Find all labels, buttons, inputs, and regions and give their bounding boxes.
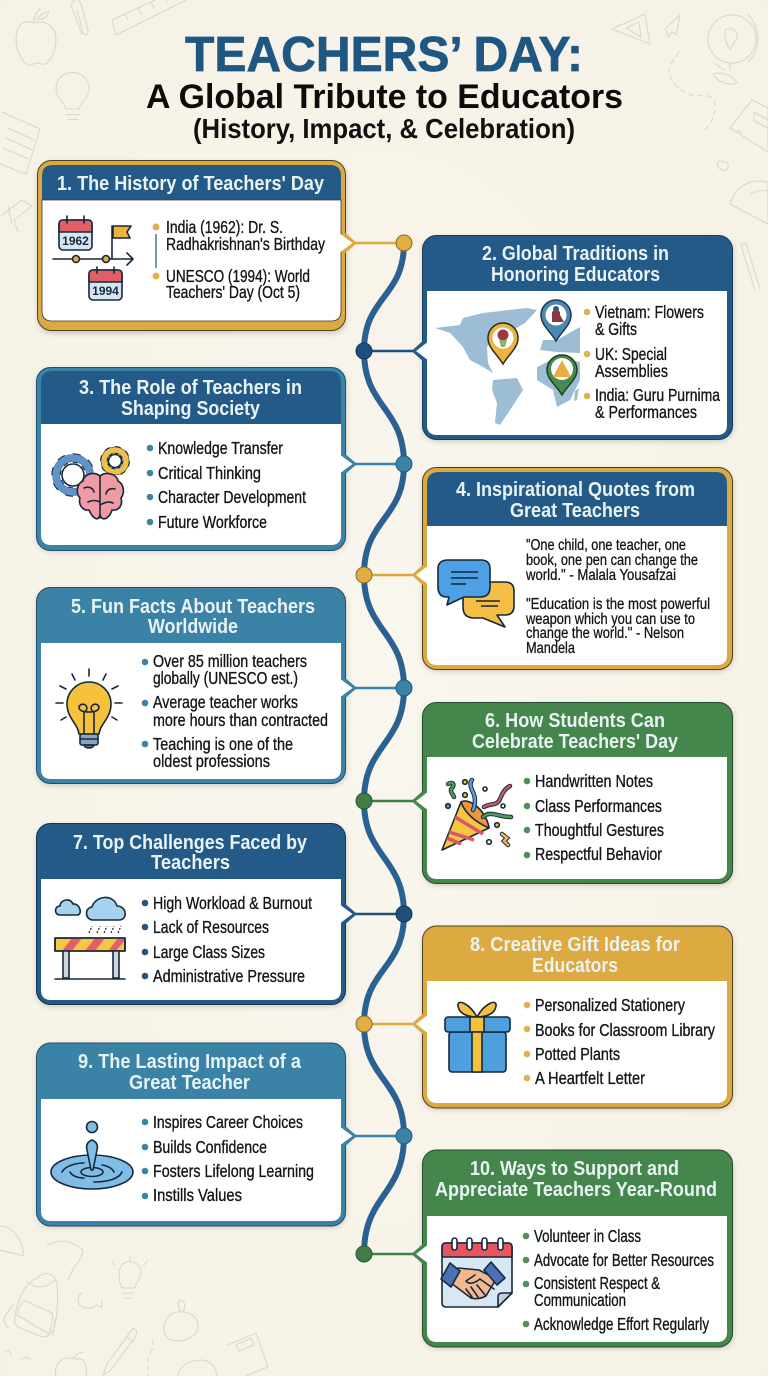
panel: 5 fun facts (36, 588, 357, 785)
list 5: Over 85 million teachers (153, 651, 307, 671)
list 8: A Heartfelt Letter (535, 1068, 645, 1088)
title (146, 28, 623, 144)
list 5: more hours than contracted (153, 710, 328, 730)
list 8: Potted Plants (535, 1044, 620, 1064)
quotes: weapon which you can use to (525, 611, 695, 628)
panel: 1 history (38, 160, 357, 333)
connector and node 3 (352, 456, 412, 472)
connector and node 7 (352, 906, 412, 922)
list 7 (142, 893, 312, 986)
list 3: Future Workforce (158, 512, 267, 532)
list 5 (142, 651, 328, 771)
panel: 6 students celebrate (412, 702, 733, 885)
list 7: Lack of Resources (153, 917, 269, 937)
list 6 (524, 771, 664, 864)
list 2: UK: Special (595, 344, 667, 364)
heading 9: Great Teacher (129, 1072, 250, 1094)
list 10: Consistent Respect & (534, 1273, 660, 1293)
icon: clouds and barrier (55, 897, 125, 979)
list 2: Vietnam: Flowers (595, 302, 704, 322)
heading 7: Teachers (151, 852, 230, 874)
connector and node 8 (356, 1016, 414, 1032)
list 6: Handwritten Notes (535, 771, 653, 791)
list 6: Respectful Behavior (535, 844, 662, 864)
heading 1: 1. The History of Teachers' Day (57, 173, 325, 195)
panel: 4 quotes (412, 468, 733, 671)
list 8: Personalized Stationery (535, 995, 685, 1015)
list 2: & Performances (595, 402, 697, 422)
icon: gears and brain (56, 450, 126, 519)
icon: light bulb (56, 669, 122, 748)
title line 1: TEACHERS’ DAY: (185, 28, 583, 82)
connector and node 5 (352, 680, 412, 696)
list 5: globally (UNESCO est.) (153, 668, 298, 688)
heading 6 (472, 710, 679, 753)
list 6: Thoughtful Gestures (535, 820, 664, 840)
heading 7 (73, 832, 308, 874)
list 1: India (1962): Dr. S. (166, 217, 283, 237)
connector and node 10 (356, 1246, 414, 1262)
quotes: world." - Malala Yousafzai (525, 567, 676, 584)
list 9: Instills Values (153, 1185, 242, 1205)
quotes: Mandela (526, 640, 575, 657)
heading 7: 7. Top Challenges Faced by (73, 832, 308, 854)
heading 5: 5. Fun Facts About Teachers (71, 596, 315, 618)
icon: calendars and timeline: 1962 (62, 234, 89, 248)
list 10: Volunteer in Class (534, 1226, 641, 1246)
heading 10: 10. Ways to Support and (470, 1158, 679, 1180)
icon: water ripple (51, 1122, 133, 1189)
heading 6: Celebrate Teachers' Day (472, 731, 679, 753)
heading 9 (78, 1051, 302, 1094)
heading 3: 3. The Role of Teachers in (79, 377, 302, 399)
list 8: Books for Classroom Library (535, 1020, 715, 1040)
icon: calendar and handshake (441, 1238, 512, 1307)
panel: 9 lasting impact (36, 1043, 357, 1227)
heading 4 (456, 479, 695, 522)
heading 3: Shaping Society (121, 398, 261, 420)
heading 5 (71, 596, 315, 638)
list 5: Teaching is one of the (153, 734, 293, 754)
heading 3 (79, 377, 302, 420)
list 7: High Workload & Burnout (153, 893, 312, 913)
panel: 7 challenges (36, 824, 357, 1006)
list 7: Administrative Pressure (153, 966, 305, 986)
list 3: Character Development (158, 487, 306, 507)
list 1: Radhakrishnan's Birthday (166, 234, 325, 254)
list 9: Inspires Career Choices (153, 1112, 303, 1132)
heading 9: 9. The Lasting Impact of a (78, 1051, 302, 1073)
panel: 10 year-round support (412, 1150, 733, 1348)
list 5: Average teacher works (153, 692, 298, 712)
connector and node 9 (352, 1128, 412, 1144)
heading 4: 4. Inspirational Quotes from (456, 479, 695, 501)
heading 2: Honoring Educators (491, 264, 660, 286)
list 8 (524, 995, 715, 1088)
connector and node 2 (356, 343, 414, 359)
icon: world map with pins (435, 300, 580, 425)
list 6: Class Performances (535, 796, 662, 816)
quotes: change the world." - Nelson (526, 625, 684, 642)
heading 8: Educators (532, 955, 618, 977)
list 9: Fosters Lifelong Learning (153, 1161, 314, 1181)
heading 10: Appreciate Teachers Year-Round (435, 1179, 717, 1201)
list 9: Builds Confidence (153, 1137, 267, 1157)
heading 6: 6. How Students Can (485, 710, 665, 732)
list 2: Assemblies (595, 361, 668, 381)
connector and node 1 (352, 235, 412, 251)
list 9 (142, 1112, 314, 1205)
icon: party popper (442, 780, 511, 850)
list 7: Large Class Sizes (153, 942, 265, 962)
title line 3: (History, Impact, & Celebration) (193, 113, 575, 144)
heading 8: 8. Creative Gift Ideas for (470, 934, 680, 956)
list 3: Critical Thinking (158, 463, 261, 483)
list 2 (584, 302, 720, 422)
icon: speech bubbles (438, 560, 514, 627)
heading 2 (482, 243, 669, 286)
panel: 3 role of teachers (36, 368, 357, 551)
panel: 2 global traditions (412, 236, 733, 441)
icon: calendars and timeline: 1994 (92, 284, 119, 298)
quotes: "One child, one teacher, one (526, 537, 686, 554)
list 10: Advocate for Better Resources (534, 1250, 714, 1270)
list 1: UNESCO (1994): World (166, 266, 310, 286)
quotes: book, one pen can change the (526, 552, 698, 569)
list 10: Acknowledge Effort Regularly (534, 1314, 709, 1334)
title line 2: A Global Tribute to Educators (146, 78, 623, 116)
panel: 8 gift ideas (412, 926, 733, 1109)
list 3 (147, 438, 306, 532)
quotes (525, 537, 710, 657)
heading 10 (435, 1158, 717, 1201)
list 2: & Gifts (595, 319, 637, 339)
connector and node 6 (356, 793, 414, 809)
list 3: Knowledge Transfer (158, 438, 283, 458)
list 5: oldest professions (153, 751, 270, 771)
heading 5: Worldwide (148, 616, 238, 638)
list 1 (152, 217, 325, 302)
heading 4: Great Teachers (510, 500, 640, 522)
list 1: Teachers' Day (Oct 5) (166, 282, 300, 302)
timeline spine (364, 243, 404, 1254)
connector and node 4 (356, 567, 414, 583)
heading 8 (470, 934, 680, 977)
list 2: India: Guru Purnima (595, 385, 720, 405)
list 10 (523, 1226, 714, 1334)
icon: gift box (445, 1002, 510, 1072)
heading 2: 2. Global Traditions in (482, 243, 669, 265)
list 10: Communication (534, 1290, 626, 1310)
quotes: "Education is the most powerful (526, 596, 710, 613)
icon: calendars and timeline (53, 216, 133, 300)
